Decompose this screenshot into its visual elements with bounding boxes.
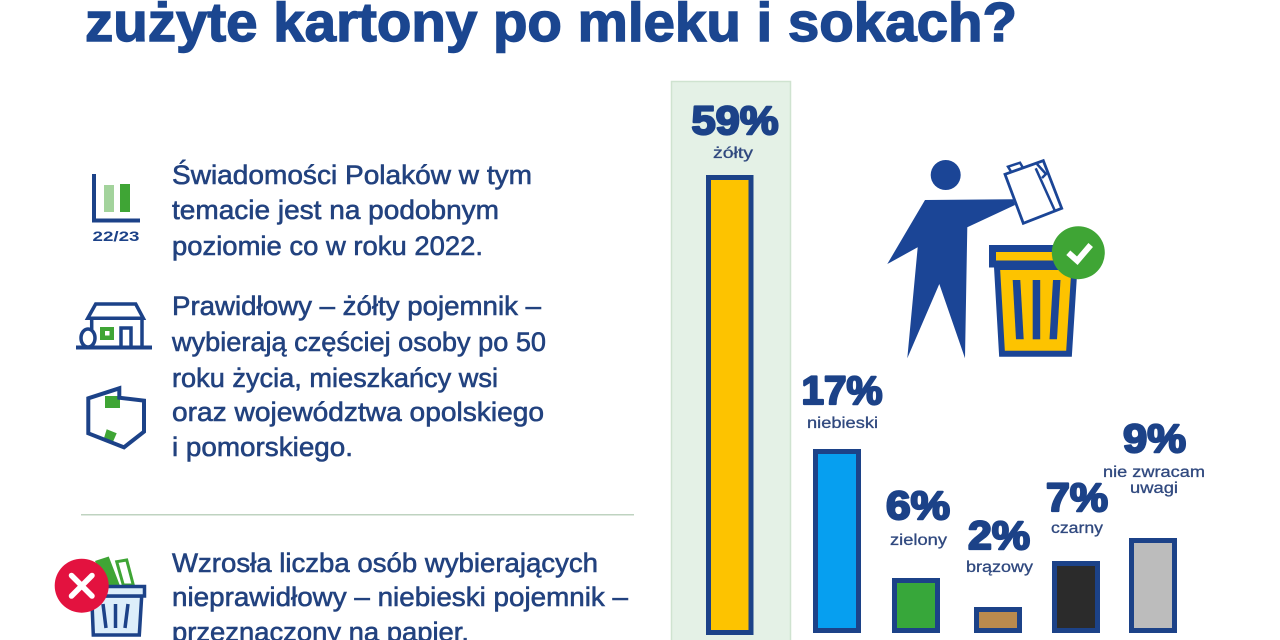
icon: map of Poland [88,388,144,447]
bar: yellow 59% [692,99,778,632]
text block: awareness: poziomie co w roku 2022. [172,231,483,261]
bar: black 7%: czarny [1051,520,1103,537]
text block: increase of incorrect choice: nieprawidłowy – niebieski pojemnik – [172,582,628,612]
text block: correct yellow container [171,291,546,462]
text block: increase of incorrect choice [172,548,628,640]
text block: awareness [172,158,532,261]
text block: increase of incorrect choice: Wzrosła liczba osób wybierających [172,548,598,578]
text block: correct yellow container: Prawidłowy – żółty pojemnik – [172,291,541,321]
icon: bar chart 22/23: 22/23 [92,228,140,244]
icon: bar chart 22/23 [92,174,140,244]
bar: brown 2% [966,514,1033,630]
bar chart [692,99,1205,632]
bar: grey 9%: 9% [1123,417,1186,461]
text block: correct yellow container: wybierają częściej osoby po 50 [171,327,546,357]
bar: green 6%: 6% [886,484,950,528]
bar: grey 9% [1103,417,1205,630]
bar: blue 17%: niebieski [807,415,878,432]
text block: awareness: Świadomości Polaków w tym [172,158,532,190]
bar: brown 2%: 2% [968,514,1030,558]
bar: yellow 59%: żółty [713,145,753,162]
bar: blue 17%: 17% [802,369,882,413]
bar: grey 9%: uwagi [1130,480,1178,497]
panel: highlighted correct answer [672,82,790,640]
icon: blue bin with cross [55,558,144,635]
bar: black 7% [1046,476,1108,630]
icon: house [76,304,152,348]
text block: correct yellow container: i pomorskiego. [172,432,353,462]
bar: green 6%: zielony [890,532,947,549]
bar: green 6% [886,484,950,630]
bar: blue 17% [802,369,882,630]
divider line [81,514,634,516]
bar: yellow 59%: 59% [692,99,778,143]
bar: black 7%: 7% [1046,476,1108,520]
bar: grey 9%: nie zwracam [1103,464,1205,481]
text block: correct yellow container: roku życia, mieszkańcy wsi [172,363,498,393]
bar: brown 2%: brązowy [966,559,1033,576]
text block: awareness: temacie jest na podobnym [172,195,499,225]
icon: person throwing carton into yellow bin [887,160,1105,358]
text block: correct yellow container: oraz województwa opolskiego [172,397,544,427]
